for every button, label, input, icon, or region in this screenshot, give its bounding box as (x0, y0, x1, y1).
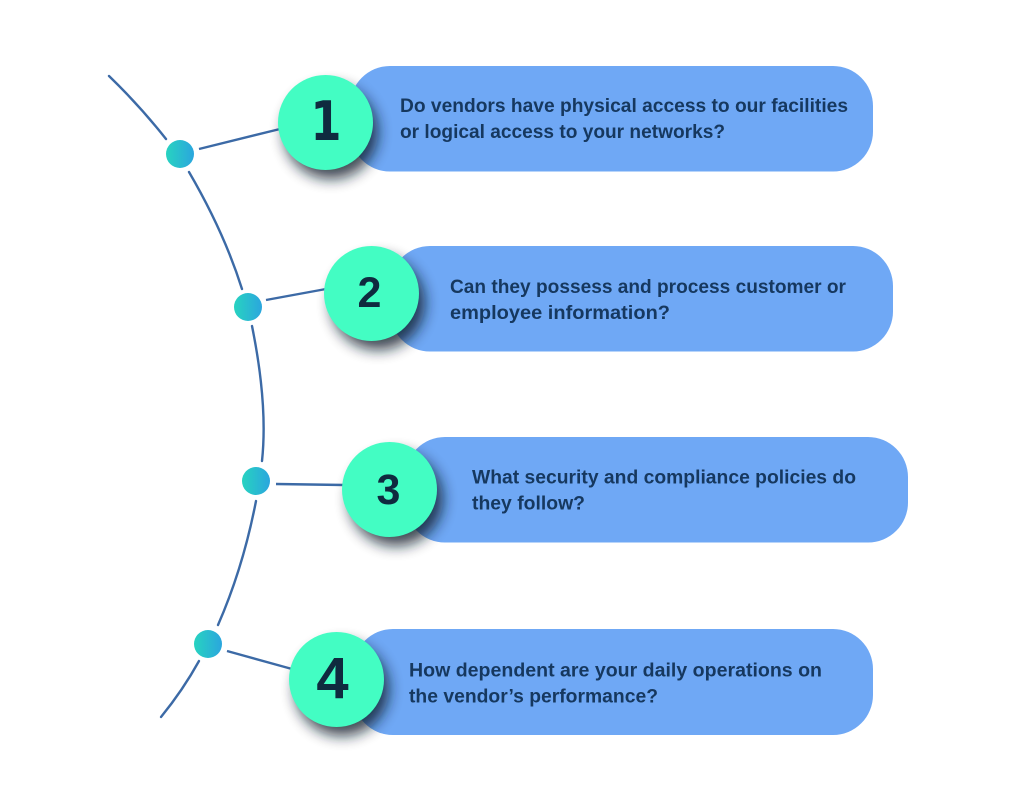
step 4 (289, 629, 873, 736)
shadow: step 4 badge (295, 642, 389, 736)
timeline dot 4 (194, 630, 222, 658)
text: step 4 (409, 660, 822, 708)
number 4: 4 (316, 646, 349, 711)
number 1: 1 (310, 90, 342, 153)
connector lines (199, 129, 344, 669)
badge: step 4 (289, 632, 384, 727)
step 1 (278, 66, 873, 179)
text: step 2: employee information? (450, 302, 670, 324)
text: step 1 (400, 95, 848, 143)
text: step 3 (472, 466, 856, 514)
shadow: step 1 badge (284, 85, 378, 179)
text: step 2: Can they possess and process customer or (450, 276, 846, 298)
text: step 3: they follow? (472, 492, 585, 514)
text: step 2 (450, 276, 846, 324)
text: step 4: the vendor’s performance? (409, 686, 658, 708)
text: step 4: How dependent are your daily operations on (409, 660, 822, 682)
timeline arc (109, 76, 264, 717)
timeline dot 2 (234, 293, 262, 321)
panel: step 2 pill (390, 246, 893, 352)
shadow: step 3 badge (349, 452, 443, 546)
badge: step 2 (324, 246, 419, 341)
panel: step 4 pill (353, 629, 873, 735)
shadow: step 2 badge (331, 256, 425, 350)
panel: step 1 pill (350, 66, 873, 172)
badge: step 3 (342, 442, 437, 537)
text: step 1: Do vendors have physical access to our facilities (400, 95, 848, 117)
timeline dot 3 (242, 467, 270, 495)
step 3 (342, 437, 908, 546)
timeline dot 1 (166, 140, 194, 168)
panel: step 3 pill (405, 437, 908, 542)
number 2: 2 (358, 269, 381, 317)
step 2 (324, 246, 893, 352)
badge: step 1 (278, 75, 373, 170)
text: step 1: or logical access to your networks? (400, 121, 725, 143)
number 3: 3 (377, 466, 400, 514)
text: step 3: What security and compliance policies do (472, 466, 856, 488)
